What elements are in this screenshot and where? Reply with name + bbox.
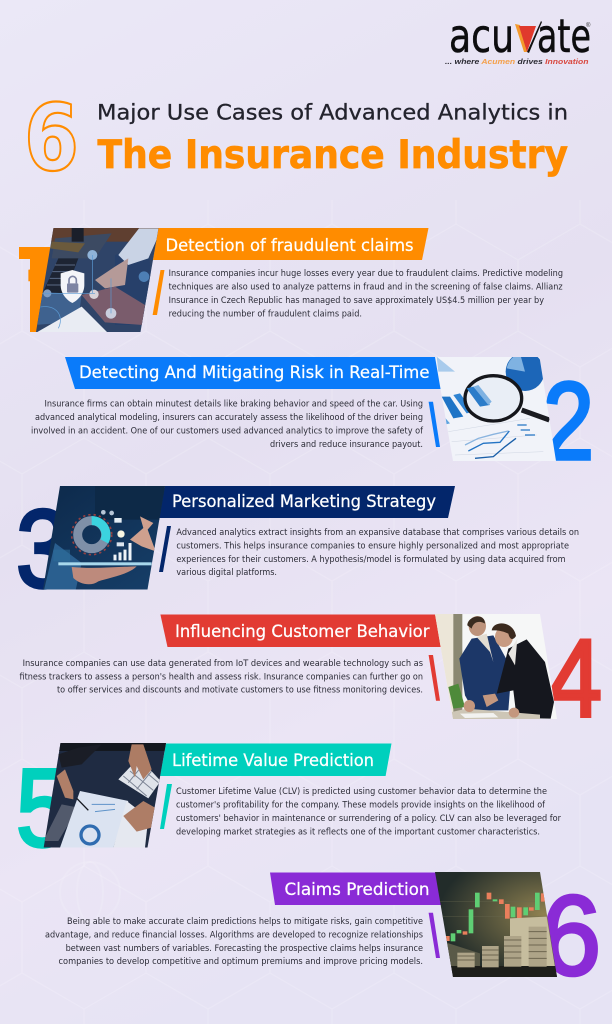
body text 2: advanced analytical modeling, insurers can accurately assess the likelihood of the driver being [35,413,423,423]
banner 1 [153,228,428,260]
body text 1: reducing the number of fraudulent claims paid. [169,310,362,320]
image: magnifier over charts [435,357,556,461]
banner 5 [160,744,392,776]
body text 2 [31,400,424,450]
logo: acuvate: ® [586,22,591,29]
body text 4: to offer services and discounts and motivate customers to use fitness monitoring devices. [57,686,423,696]
logo tagline: ... where Acumen drives Innovation [445,57,589,66]
accent slash 4 [429,655,440,701]
accent slash 2 [429,402,440,447]
body text 5: Customer Lifetime Value (CLV) is predicted using customer behavior data to determine the [176,787,547,797]
body text 6: Being able to make accurate claim predictions helps to mitigate risks, gain competitive [67,917,423,927]
body text 4: fitness trackers to assess a person's health and assess risk. Insurance companies can further go on [20,672,423,682]
body text 6: companies to develop competitive and optimum premiums and improve pricing models. [58,957,423,967]
heading 5: Lifetime Value Prediction [172,750,374,770]
body text 1: Insurance companies incur huge losses every year due to fraudulent claims. Predictive modeling [169,269,563,279]
title line 1: Major Use Cases of Advanced Analytics in [97,100,568,126]
section 1: detection of fraudulent claims [19,228,562,332]
image: candlesticks and coin stacks [435,872,557,977]
body text 1: Insurance in Czech Republic has managed to save approximately US$4.5 million per year by [169,296,544,306]
heading 4: Influencing Customer Behavior [175,621,430,641]
accent slash 5 [160,784,172,829]
section 5: lifetime value prediction [18,743,561,849]
number 1: 1 [15,207,89,388]
logo: acuvate: acu [449,9,514,63]
body text 6: advantage, and reduce financial losses. Algorithms are developed to recognize relationships [45,930,423,940]
image: cyber security hands [36,228,158,332]
body text 3: customers. This helps insurance companies to ensure highly personalized and most appropriate [176,542,569,552]
section 2: detecting and mitigating risk [32,357,591,461]
image: hands over documents [44,743,166,848]
body text 4: Insurance companies can use data generated from IoT devices and wearable technology such as [23,659,423,669]
heading 2: Detecting And Mitigating Risk in Real-Time [79,362,430,382]
number 6: 6 [541,872,601,998]
body text 4 [20,659,423,696]
accent slash 6 [429,913,440,958]
number 3: 3 [16,488,70,611]
body text 3: Advanced analytics extract insights from an expansive database that comprises various details on [176,528,579,538]
body text 1: techniques are also used to analyze patterns in fraud and in the screening of false claims. Allianz [169,282,563,292]
image: two businessmen [435,614,557,719]
title line 2: The Insurance Industry [98,133,568,178]
number 1 [19,247,50,332]
section 6: claims prediction [46,872,598,978]
body text 3 [176,528,579,578]
section 4: influencing customer behavior [20,614,601,719]
body text 3: various digital platforms. [176,568,277,578]
logo: acuvate [445,9,591,66]
banner 3 [158,486,455,518]
accent slash 1 [153,270,164,315]
body text 2: drivers and reduce insurance payout. [270,440,423,450]
body text 5 [176,787,561,838]
logo: acuvate: ate [537,9,591,63]
heading 6: Claims Prediction [284,879,430,899]
body text 2: Insurance firms can obtain minutest details like braking behavior and speed of the car. Using [44,400,423,410]
section 3: personalized marketing strategy [18,486,578,590]
body text 6 [45,917,423,967]
body text 6: between vast numbers of variables. Forecasting the prospective claims helps insurance [66,944,423,954]
accent slash 3 [159,526,171,572]
banner 2 [65,357,441,389]
number 5: 5 [16,747,70,870]
body text 1 [169,269,563,320]
banner 4 [160,614,441,647]
big outlined 6: 6 [24,84,79,192]
number 2: 2 [543,360,594,483]
image: tablet analytics [43,486,165,590]
number 4: 4 [548,617,602,740]
body text 5: customers' behavior in maintenance or surrendering of a policy. CLV can also be leveraged for [176,814,561,824]
body text 3: experiences for their customers. A hypothesis/model is formulated by using data acquired from [176,555,566,565]
heading 1: Detection of fraudulent claims [166,235,414,255]
banner 6 [270,872,441,905]
heading 3: Personalized Marketing Strategy [172,491,436,511]
body text 5: developing market strategies as it reflects one of the important customer characteristics. [176,828,540,838]
body text 2: involved in an accident. One of our customers used advanced analytics to improve the safety of [31,426,424,436]
body text 5: customer's profitability for the company. These models provide insights on the likelihood of [176,800,546,810]
